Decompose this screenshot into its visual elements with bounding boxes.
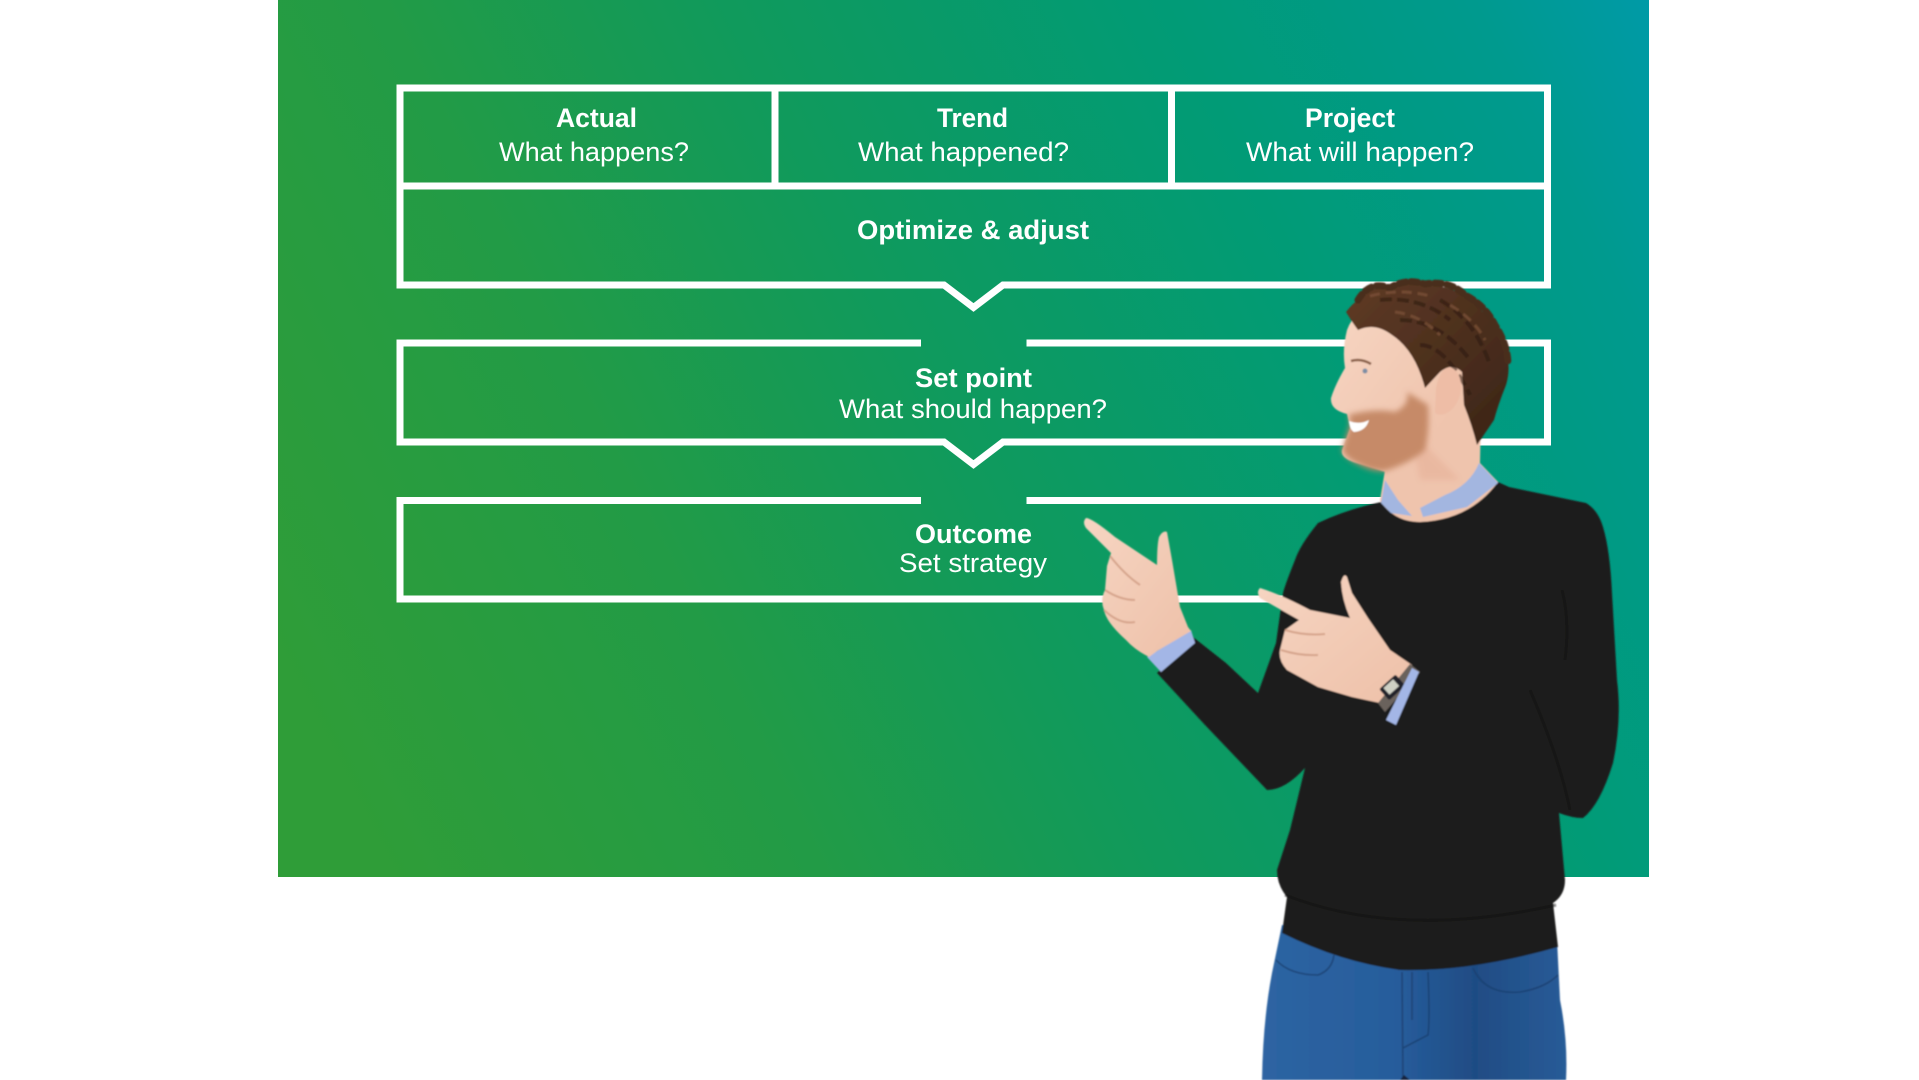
Trend cell text: [858, 103, 1069, 167]
Trend cell text: Trend: [937, 103, 1008, 133]
panel: outcome box: [400, 500, 1400, 599]
sweater: [1157, 482, 1619, 970]
set point text: [839, 363, 1107, 424]
figure: man pointing at the diagram: [1084, 282, 1619, 1080]
left hand finger creases: [1104, 556, 1140, 622]
shirt collar: [1381, 463, 1498, 517]
panel: set point box: [400, 343, 1548, 464]
Trend cell text: What happened?: [858, 137, 1069, 167]
set point text: Set point: [915, 363, 1032, 393]
jeans: [1262, 925, 1566, 1080]
outcome text: Outcome: [915, 519, 1032, 549]
right pointing hand: [1258, 575, 1412, 703]
smile teeth: [1349, 420, 1369, 432]
wristwatch: [1378, 664, 1420, 712]
left cuff: [1147, 630, 1195, 672]
neck and face: [1331, 305, 1500, 532]
left pointing hand: [1084, 518, 1191, 657]
outcome text: [899, 519, 1048, 578]
hair: [1346, 282, 1509, 445]
Project cell text: [1246, 103, 1474, 167]
beard: [1342, 392, 1429, 471]
green gradient background panel: [278, 0, 1649, 877]
Project cell text: Project: [1305, 103, 1395, 133]
Project cell text: What will happen?: [1246, 137, 1474, 167]
outcome text: Set strategy: [899, 548, 1048, 578]
right cuff: [1386, 668, 1419, 725]
Optimize and adjust text: Optimize & adjust: [857, 215, 1089, 245]
Actual cell text: Actual: [556, 103, 637, 133]
panel: top flow box: [400, 88, 1548, 308]
set point text: What should happen?: [839, 394, 1107, 424]
Actual cell text: [499, 103, 689, 167]
right hand finger creases: [1281, 630, 1325, 655]
Actual cell text: What happens?: [499, 137, 689, 167]
ear: [1435, 367, 1461, 415]
